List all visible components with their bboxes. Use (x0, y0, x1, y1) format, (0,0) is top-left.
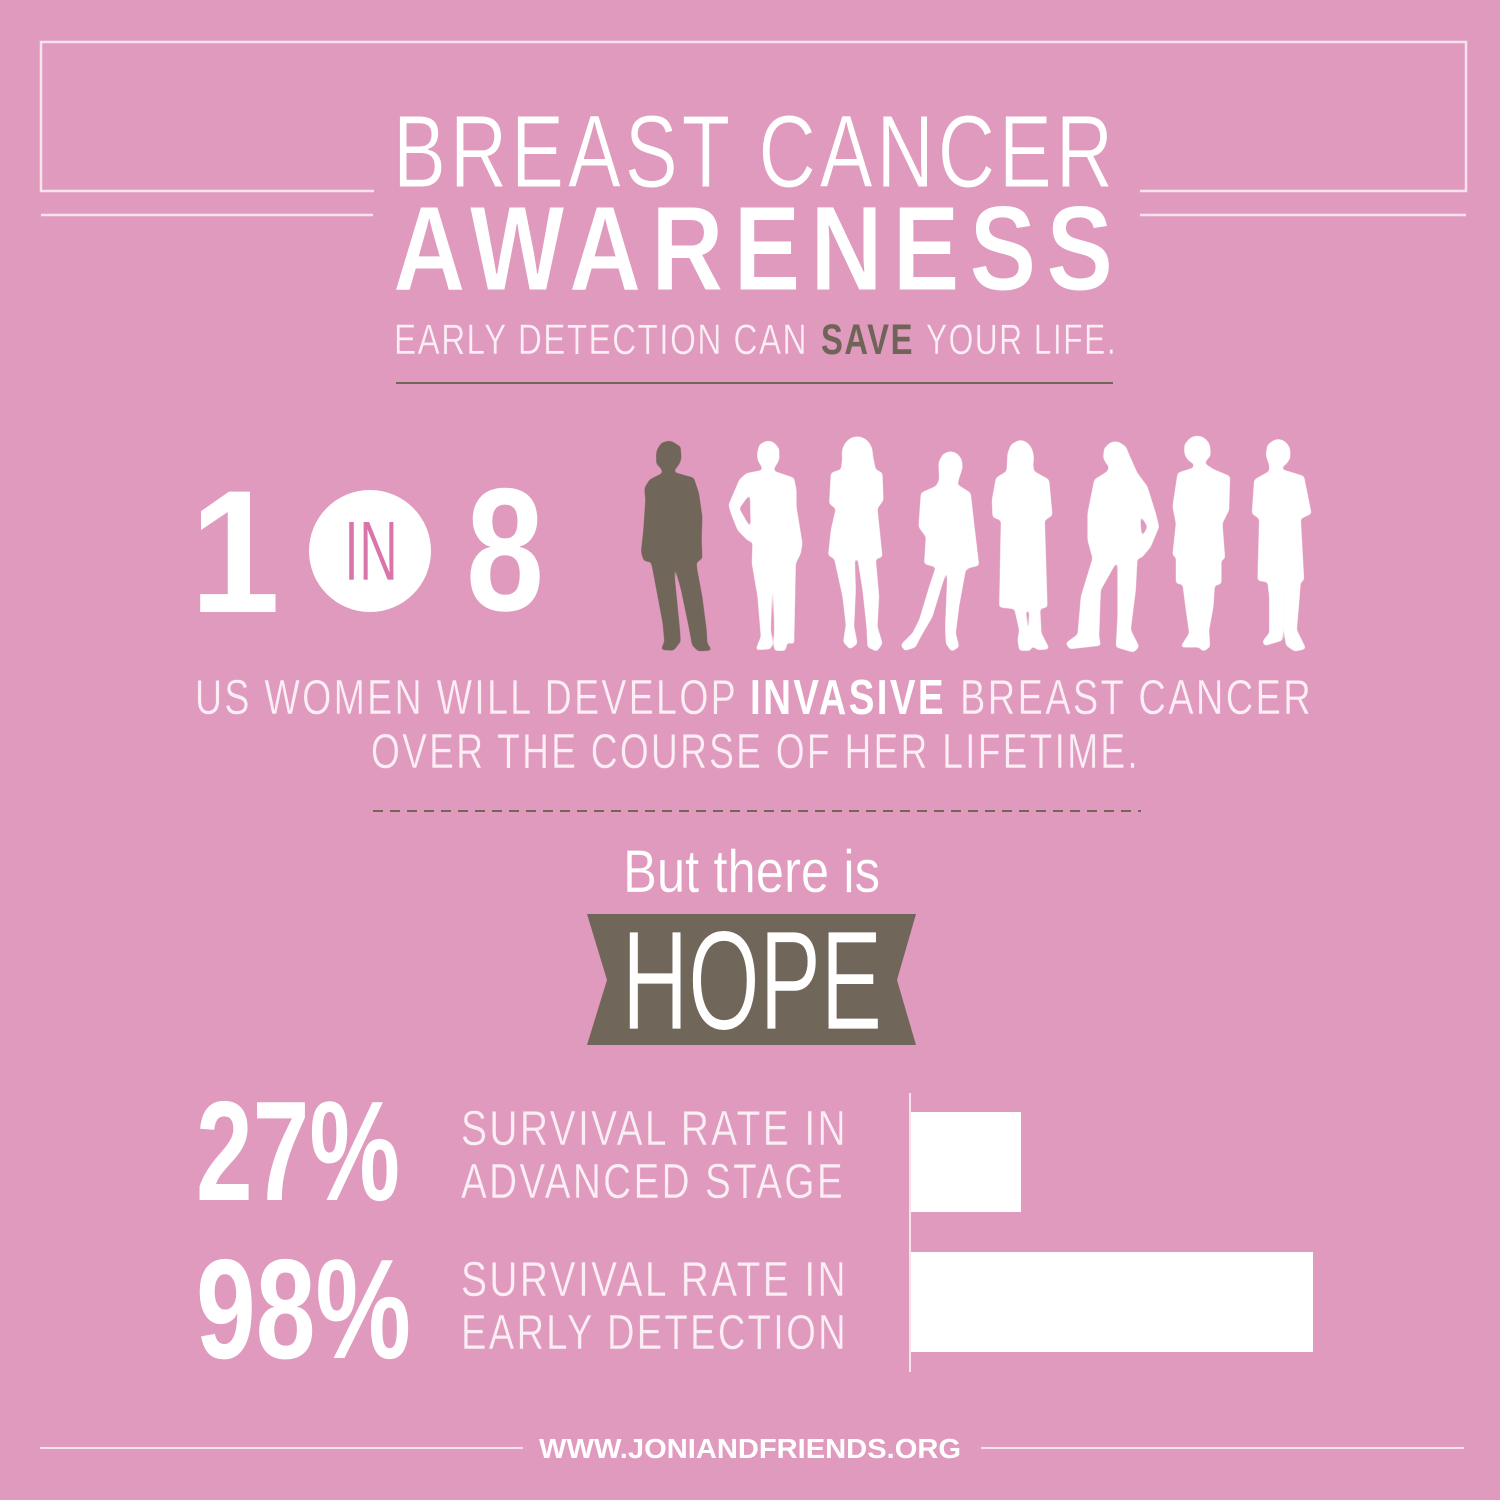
statistic: 1 in 8: 1 (190, 455, 280, 650)
silhouettes of eight women, one highlighted (642, 437, 1311, 652)
title: AWARENESS (393, 180, 1123, 316)
bar chart (909, 1093, 1313, 1372)
footer: WWW.JONIANDFRIENDS.ORG (539, 1433, 961, 1464)
silhouette 1 highlighted (642, 442, 711, 651)
statistic: 27 percent: 27% (196, 1072, 400, 1231)
statement text: INVASIVE (750, 671, 946, 725)
statistic: 27 percent: ADVANCED STAGE (461, 1155, 845, 1209)
statistic: 98 percent: EARLY DETECTION (461, 1306, 848, 1360)
statistic: 98 percent (196, 1230, 848, 1389)
decorative title frame (41, 42, 1466, 215)
subtitle: YOUR LIFE. (926, 316, 1117, 364)
statistic: 27 percent (196, 1072, 848, 1231)
statistic: 98 percent: SURVIVAL RATE IN (461, 1253, 848, 1307)
but there is: But there is (623, 838, 880, 905)
statistic: 98 percent: 98% (196, 1230, 411, 1389)
hope ribbon (587, 901, 916, 1059)
statistic: 1 in 8: IN (344, 504, 398, 598)
statistic: 27 percent: SURVIVAL RATE IN (461, 1102, 848, 1156)
title: BREAST CANCER (393, 94, 1117, 209)
statistic: 1 in 8: 8 (466, 453, 544, 648)
statement text: OVER THE COURSE OF HER LIFETIME. (371, 725, 1140, 779)
statement text: BREAST CANCER (960, 671, 1313, 725)
statement text (195, 671, 1313, 779)
title (393, 94, 1123, 316)
statistic: 1 in 8 (190, 453, 544, 650)
white silhouettes (729, 437, 1311, 652)
statement text: US WOMEN WILL DEVELOP (195, 671, 738, 725)
subtitle: EARLY DETECTION CAN (394, 316, 808, 364)
subtitle: SAVE (821, 316, 914, 364)
hope ribbon: HOPE (622, 901, 882, 1059)
